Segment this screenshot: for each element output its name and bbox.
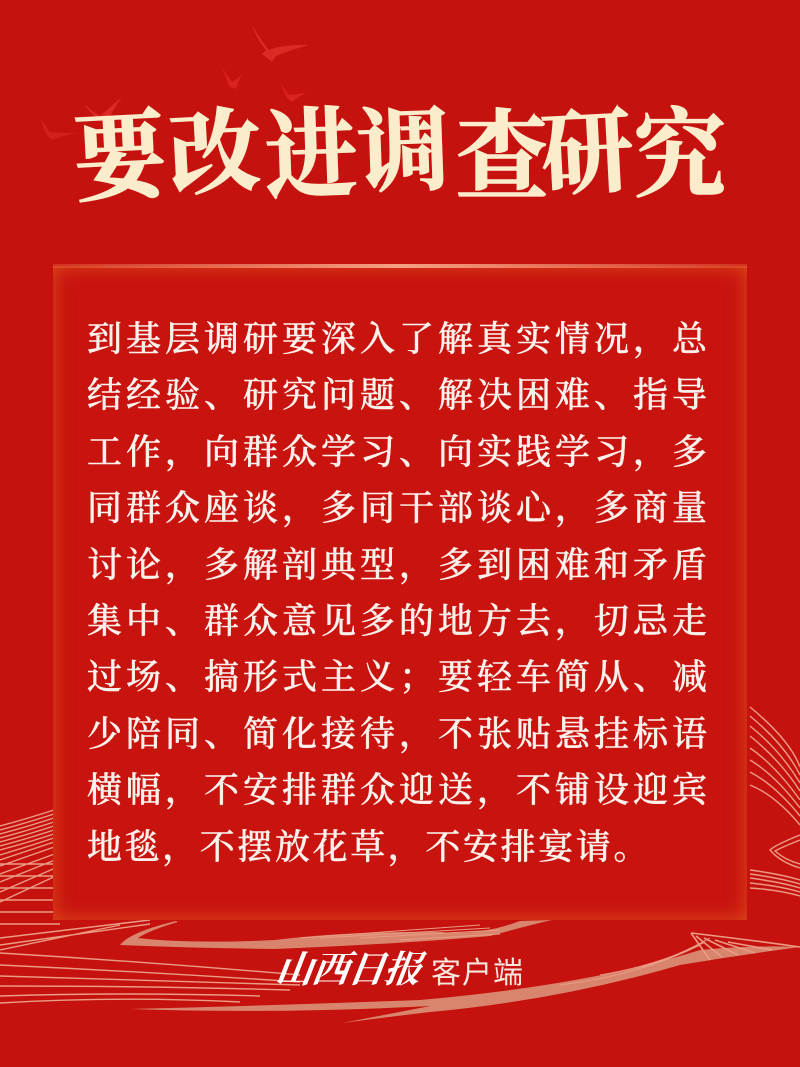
title: 要 — [71, 102, 169, 214]
title: 进 — [263, 100, 359, 212]
body text: 集中、群众意见多的地方去，切忌走 — [87, 602, 711, 641]
title: 改 — [166, 101, 264, 207]
small bird left — [222, 67, 242, 89]
logo: 山西日报客户端: 客户端 — [431, 957, 524, 990]
body text: 少陪同、简化接待，不张贴悬挂标语 — [87, 715, 711, 754]
body text — [87, 320, 711, 867]
body text: 工作，向群众学习、向实践学习，多 — [87, 433, 711, 472]
body text: 同群众座谈，多同干部谈心，多商量 — [87, 489, 711, 528]
title: 调 — [355, 99, 451, 205]
bird behind title — [82, 97, 122, 124]
title: 究 — [634, 102, 726, 210]
body text: 地毯，不摆放花草，不安排宴请。 — [87, 828, 651, 867]
panel: main text — [53, 266, 747, 920]
title — [71, 99, 726, 214]
faint bird far left — [40, 118, 76, 140]
logo: 山西日报客户端: 山西日报 — [273, 950, 423, 991]
body text: 过场、搞形式主义；要轻车简从、减 — [87, 658, 711, 697]
large bird — [252, 25, 309, 62]
title: 研 — [538, 101, 636, 207]
title: 查 — [456, 103, 548, 213]
body text: 讨论，多解剖典型，多到困难和矛盾 — [87, 546, 711, 585]
small bird right — [280, 82, 306, 102]
logo: 山西日报客户端 — [273, 950, 524, 991]
body text: 结经验、研究问题、解决困难、指导 — [87, 376, 711, 415]
flock of red birds — [40, 26, 308, 140]
body text: 到基层调研要深入了解真实情况，总 — [87, 320, 711, 359]
body text: 横幅，不安排群众迎送，不铺设迎宾 — [87, 771, 711, 810]
